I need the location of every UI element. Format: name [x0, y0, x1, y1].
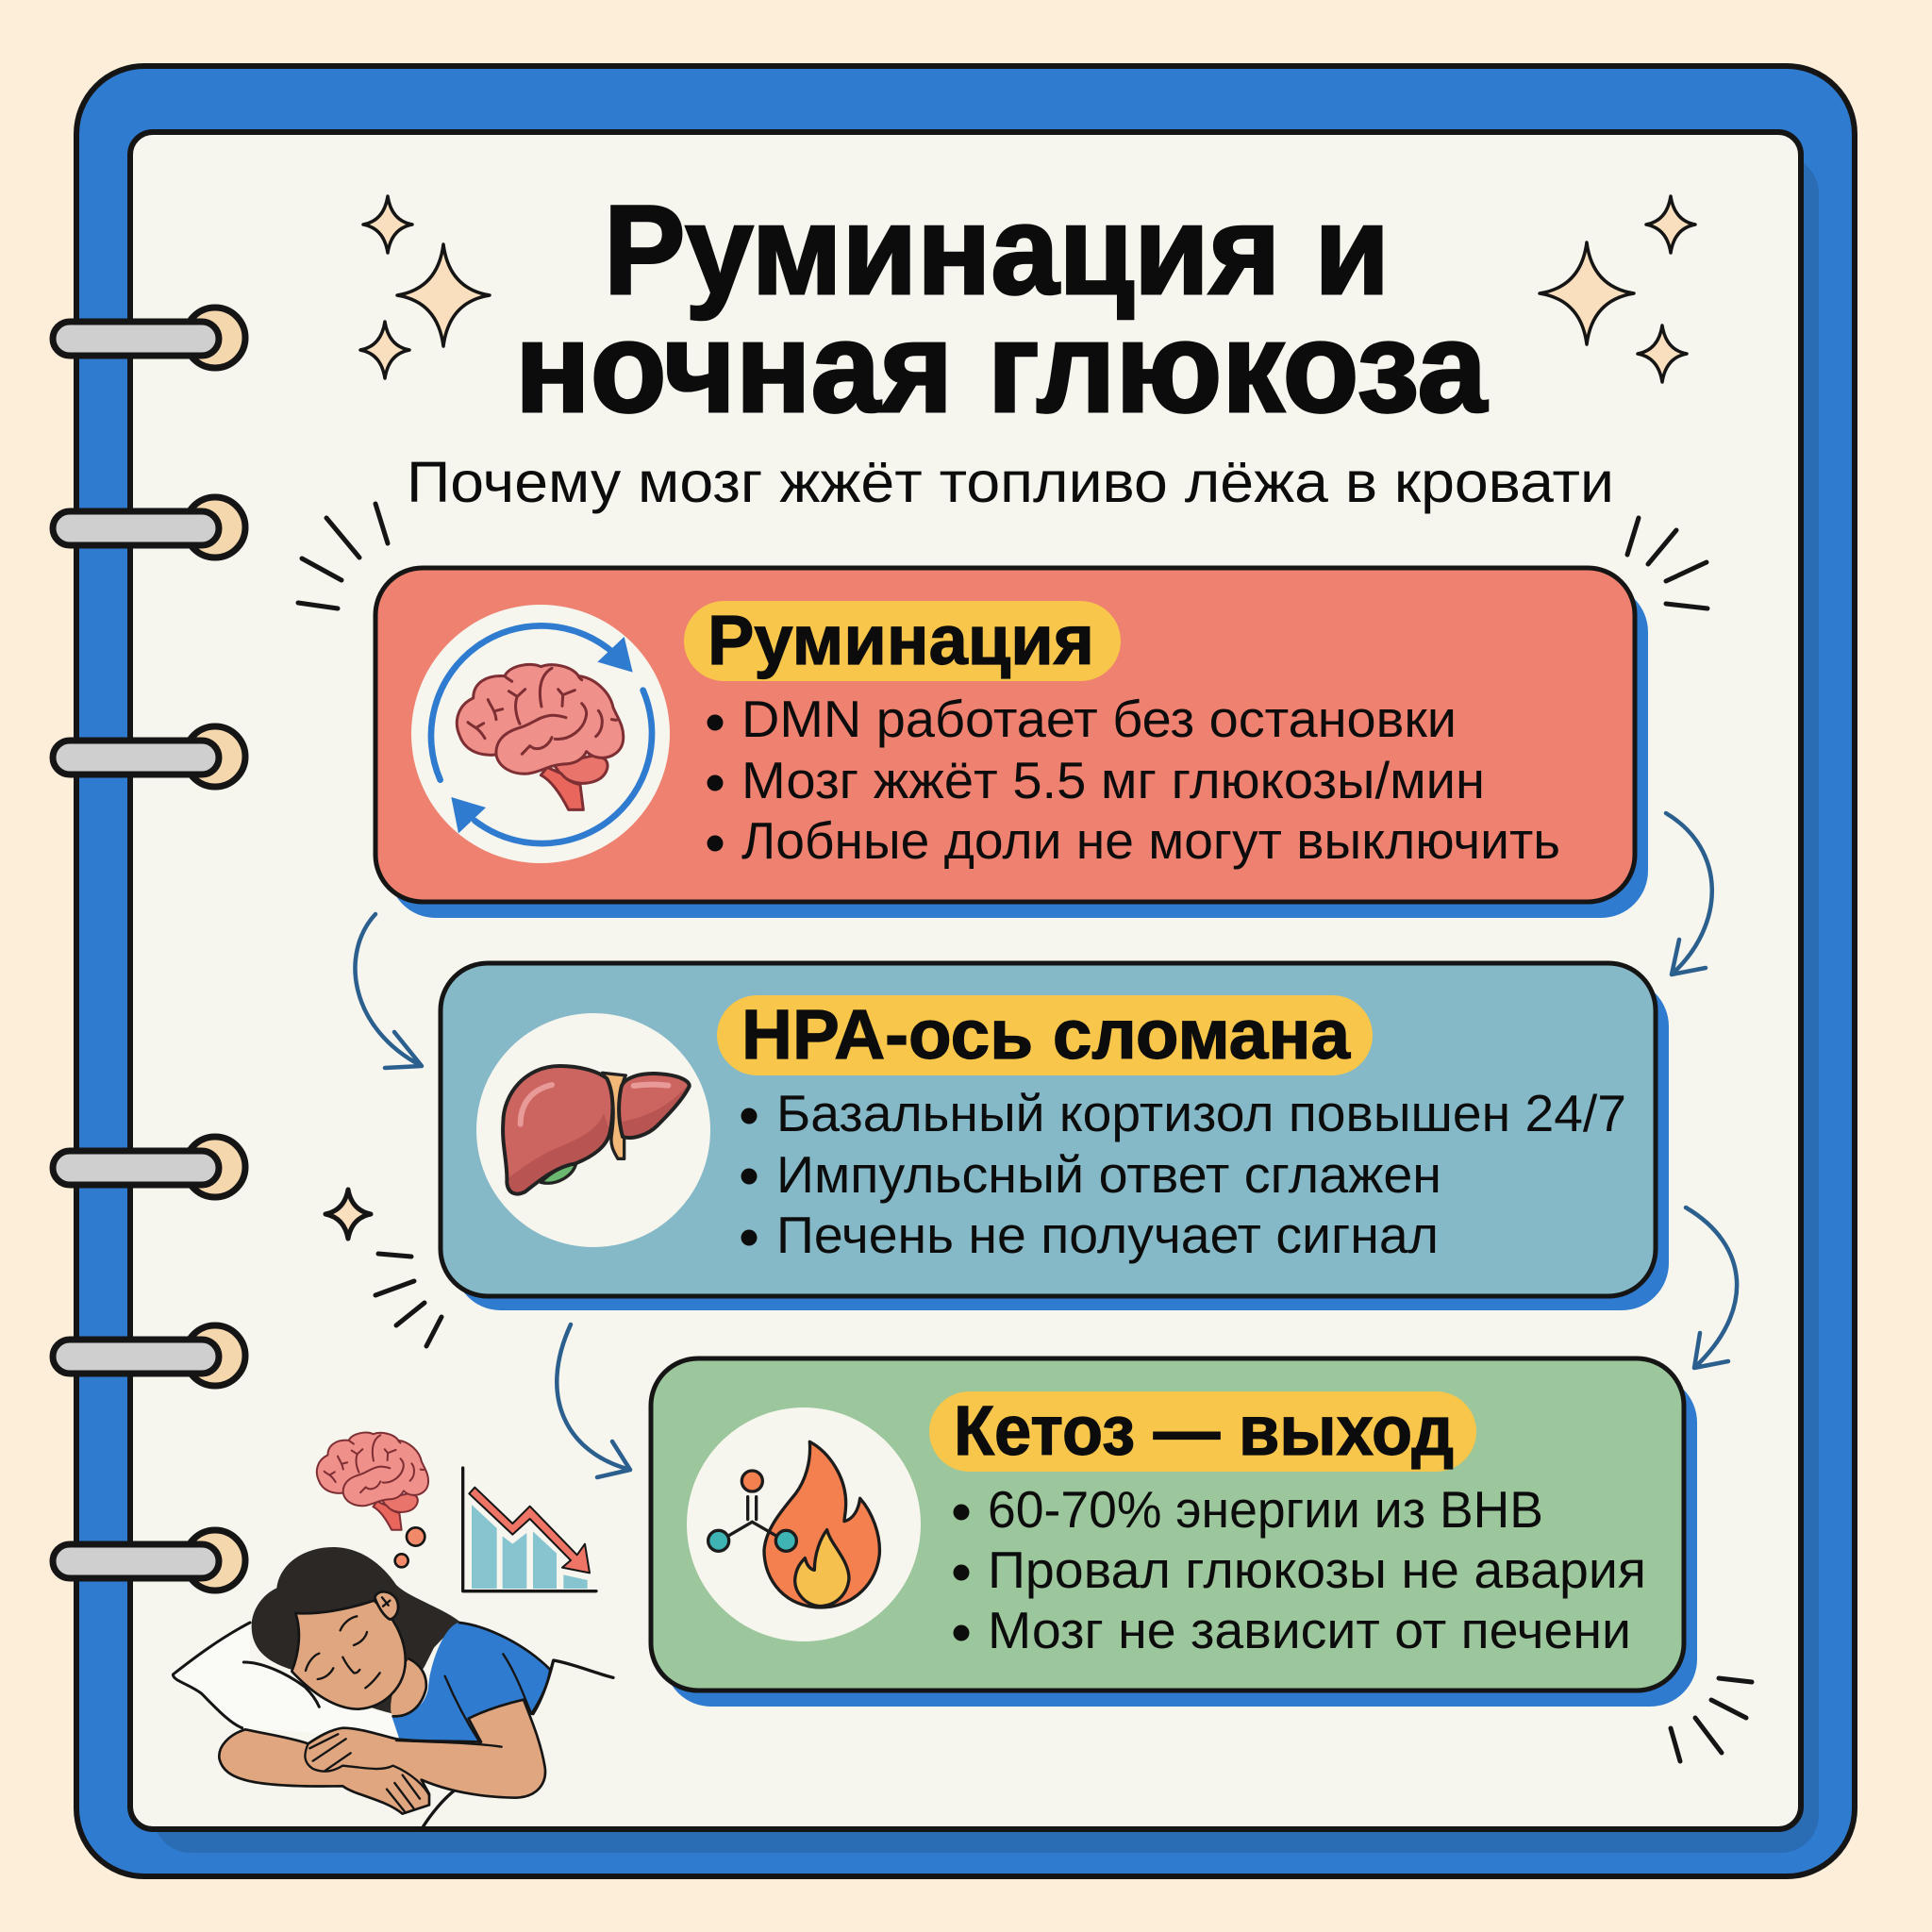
- icon: liver: [476, 1013, 710, 1247]
- bullet list: ketosis: Провал глюкозы не авария: [988, 1541, 1646, 1599]
- bullet list: ketosis: Мозг не зависит от печени: [988, 1601, 1631, 1659]
- panel: rumination: [375, 568, 1648, 918]
- notebook page: [130, 132, 1819, 1853]
- sparkles right of title: [1540, 196, 1695, 382]
- bullet list: HPA axis: Базальный кортизол повышен 24/7: [776, 1084, 1626, 1142]
- fingers and arm creases: [305, 1654, 531, 1813]
- subtitle: Почему мозг жжёт топливо лёжа в кровати: [407, 450, 1614, 514]
- thought bubbles: [395, 1527, 425, 1567]
- icon: brain with cycle arrows: [411, 605, 670, 863]
- hair: [252, 1547, 459, 1714]
- arrow: card 1 to card 2 right: [1666, 813, 1712, 974]
- arrow: card 1 to card 2 left: [355, 914, 422, 1068]
- icon: flame with molecule: [687, 1407, 921, 1641]
- spiral ring 3: [53, 726, 245, 787]
- title: [515, 180, 1488, 439]
- face: [291, 1601, 406, 1709]
- pillow fold: [243, 1662, 319, 1707]
- bullet list: rumination: Лобные доли не могут выключить: [741, 811, 1560, 870]
- sparkles left of title: [360, 196, 490, 378]
- arrow: card 2 to card 3 left: [557, 1324, 630, 1477]
- facial features: [306, 1597, 390, 1688]
- heading pill: ketosis: Кетоз — выход: [954, 1391, 1454, 1470]
- shirt: [391, 1623, 550, 1742]
- spiral ring 1: [53, 308, 245, 368]
- spiral ring 6: [53, 1530, 245, 1591]
- bullet list: HPA axis: [741, 1084, 1626, 1264]
- bullet list: HPA axis: Импульсный ответ сглажен: [776, 1145, 1441, 1204]
- burst lines top right: [1627, 518, 1707, 608]
- bullet list: rumination: Мозг жжёт 5.5 мг глюкозы/мин: [741, 751, 1485, 809]
- illustration: sleeping woman with thought brain and falling chart: [173, 1433, 613, 1827]
- heading pill: rumination: Руминация: [708, 601, 1094, 679]
- spiral ring 5: [53, 1325, 245, 1386]
- arrow: card 2 to card 3 right: [1686, 1208, 1737, 1368]
- bullet list: ketosis: [953, 1480, 1646, 1659]
- spiral ring 4: [53, 1137, 245, 1197]
- bed sheet lines: [423, 1660, 613, 1827]
- burst lines beside card 3: [1671, 1678, 1752, 1761]
- sparkle beside card 2: [325, 1190, 371, 1239]
- ear: [375, 1591, 398, 1620]
- bullet list: rumination: [708, 690, 1560, 870]
- spiral ring 2: [53, 497, 245, 558]
- bullet list: rumination: DMN работает без остановки: [741, 690, 1457, 748]
- thought brain: [317, 1433, 428, 1530]
- burst lines top left: [298, 504, 388, 608]
- heading pill: HPA axis: HPA-ось сломана: [741, 995, 1351, 1074]
- title: Руминация и: [604, 180, 1390, 321]
- neck: [391, 1658, 426, 1716]
- burst lines beside card 2: [375, 1254, 441, 1346]
- bullet list: HPA axis: Печень не получает сигнал: [776, 1206, 1439, 1264]
- title: ночная глюкоза: [515, 295, 1488, 439]
- panel: HPA axis: [441, 963, 1669, 1310]
- pillow: [173, 1623, 399, 1739]
- falling glucose chart: [463, 1468, 596, 1591]
- bullet list: ketosis: 60-70% энергии из BHB: [988, 1480, 1543, 1539]
- panel: ketosis: [651, 1358, 1697, 1707]
- folded arms: [219, 1700, 545, 1814]
